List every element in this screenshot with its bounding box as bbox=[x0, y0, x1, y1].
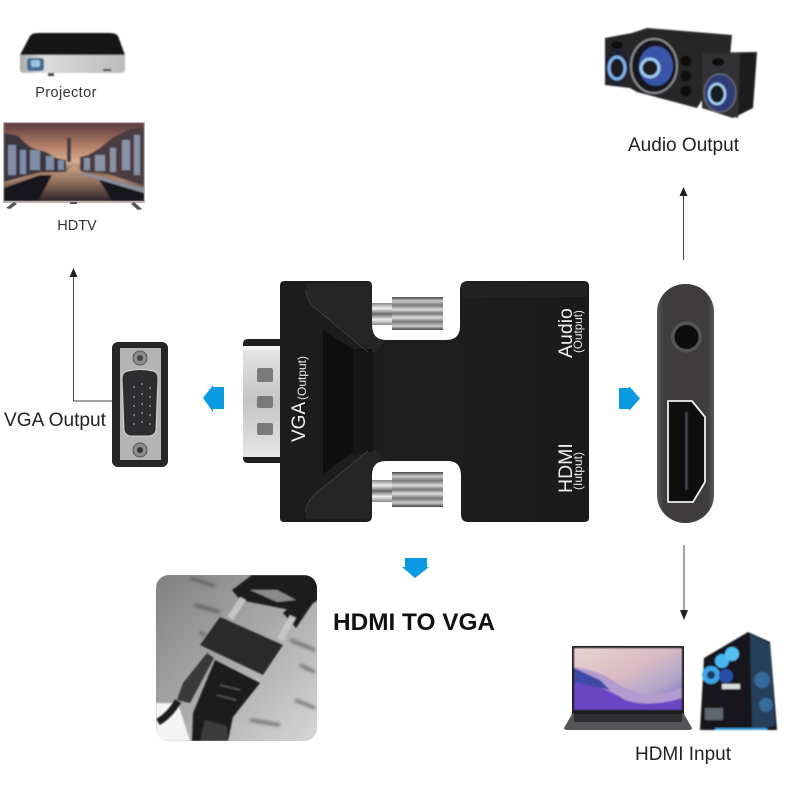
VGA plug shell bbox=[243, 339, 282, 463]
arrow: down to sources bbox=[680, 545, 688, 620]
icon: VGA port bbox=[112, 342, 168, 467]
label: Audio Output: Audio Output bbox=[628, 135, 740, 156]
icon: laptop bbox=[564, 646, 692, 730]
arrow: up to displays bbox=[70, 268, 112, 401]
VGA sublabel: (Output) bbox=[295, 356, 309, 400]
arrow: up to audio bbox=[680, 187, 688, 260]
adapter body bbox=[280, 281, 589, 522]
Audio label: Audio bbox=[555, 308, 577, 358]
icon: audio jack bbox=[671, 322, 702, 352]
icon: projector bbox=[20, 33, 125, 76]
HDMI label: HDMI bbox=[555, 443, 577, 493]
heading: HDMI TO VGA: HDMI TO VGA bbox=[333, 609, 495, 636]
label: VGA Output: VGA Output bbox=[4, 410, 107, 431]
side view panel bbox=[657, 284, 714, 523]
top screw bbox=[370, 297, 443, 330]
label: HDMI Input: HDMI Input bbox=[635, 744, 732, 765]
icon: HDMI port bbox=[668, 401, 705, 502]
arrow: blue right bbox=[619, 386, 640, 411]
photo: adapter in use bbox=[156, 575, 318, 741]
icon: desktop tower bbox=[700, 632, 777, 730]
VGA label: VGA bbox=[289, 402, 310, 442]
arrow: blue left bbox=[203, 385, 224, 412]
label: HDTV: HDTV bbox=[57, 218, 97, 234]
icon: HDTV bbox=[3, 122, 145, 210]
icon: speakers bbox=[605, 28, 757, 118]
body facets bbox=[306, 283, 587, 519]
bottom screw bbox=[370, 472, 443, 507]
arrow: blue down bbox=[402, 558, 429, 578]
adapter bbox=[243, 281, 589, 522]
label: Projector: Projector bbox=[35, 85, 97, 101]
Audio sublabel: (Output) bbox=[572, 310, 585, 353]
HDMI sublabel: (Iutput) bbox=[571, 452, 585, 490]
